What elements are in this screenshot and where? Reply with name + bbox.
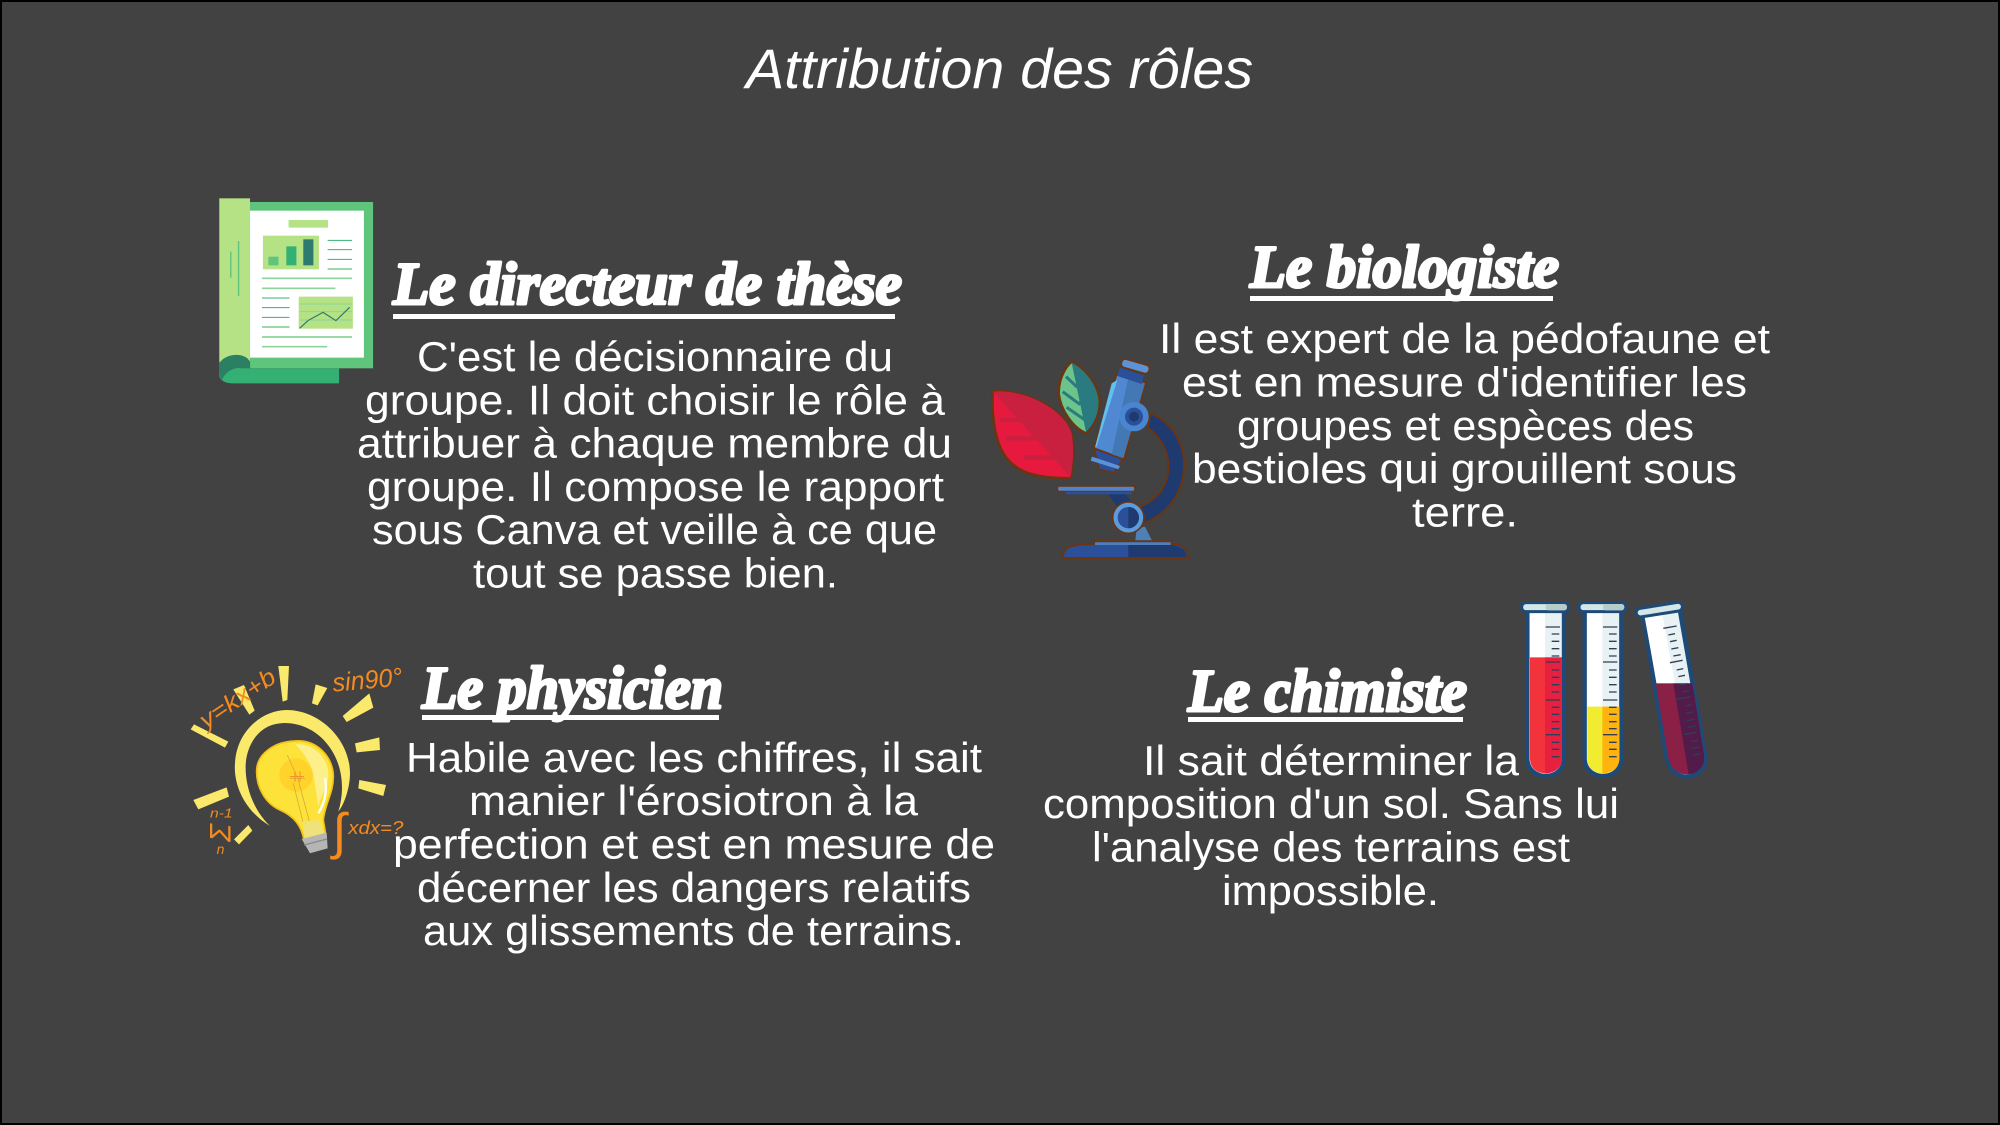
text block: physicien description: manier l'érosiotron à la [469, 777, 919, 824]
icon: light bulb with formulas [191, 662, 404, 860]
text block: chimiste description: composition d'un sol. Sans lui [1043, 780, 1619, 827]
text block: directeur description: groupe. Il compose le rapport [367, 463, 944, 510]
text block: directeur description: tout se passe bien. [473, 550, 838, 597]
formulas: Σ [205, 823, 238, 843]
text block: directeur description: groupe. Il doit choisir le rôle à [365, 376, 946, 423]
heading: le chimiste: Le chimiste [1187, 658, 1467, 724]
text block: biologiste description: terre. [1412, 488, 1518, 536]
text block: biologiste description: Il est expert de la pédofaune et [1159, 315, 1770, 362]
panel: le directeur de thèse [219, 198, 952, 597]
text block: physicien description: perfection et est en mesure de [393, 820, 995, 868]
text block: physicien description [393, 734, 995, 954]
tube purple [1636, 602, 1713, 778]
text block: chimiste description: l'analyse des terrains est [1092, 824, 1570, 870]
formulas: sin90° [331, 662, 404, 698]
formulas: xdx=? [347, 817, 404, 838]
heading: le physicien: Le physicien [421, 655, 723, 721]
text block: biologiste description [1159, 315, 1770, 536]
text block: chimiste description: impossible. [1222, 867, 1439, 914]
text block: chimiste description: Il sait déterminer la [1143, 737, 1520, 784]
formulas: n [217, 841, 225, 857]
heading: le biologiste: Le biologiste [1249, 234, 1559, 300]
tube red [1522, 603, 1568, 776]
text block: biologiste description: groupes et espèces des [1237, 402, 1694, 449]
icon: microscope and leaves [992, 358, 1188, 558]
text block: biologiste description: est en mesure d'identifier les [1182, 358, 1747, 405]
text block: physicien description: Habile avec les chiffres, il sait [406, 734, 982, 781]
title: Attribution des rôles [743, 37, 1253, 100]
icon: test tubes [1522, 602, 1713, 778]
tube yellow [1579, 603, 1626, 776]
panel: le biologiste [992, 234, 1770, 558]
panel: le physicien [191, 655, 995, 954]
text block: chimiste description [1043, 737, 1619, 914]
icon: document with charts [219, 198, 373, 383]
formulas: n-1 [210, 805, 233, 820]
formulas: ∫ [330, 803, 350, 860]
text block: directeur description [357, 333, 952, 597]
heading: le directeur de thèse: Le directeur de thèse [392, 251, 902, 317]
text block: physicien description: aux glissements de terrains. [423, 907, 964, 954]
text block: directeur description: sous Canva et veille à ce que [372, 506, 937, 553]
panel: le chimiste [1043, 602, 1713, 914]
text block: directeur description: C'est le décisionnaire du [417, 333, 893, 380]
text block: directeur description: attribuer à chaque membre du [357, 420, 952, 467]
text block: physicien description: décerner les dangers relatifs [417, 864, 971, 911]
text block: biologiste description: bestioles qui grouillent sous [1192, 445, 1737, 492]
formulas [192, 662, 404, 860]
formulas: y=kx+b [192, 663, 281, 736]
